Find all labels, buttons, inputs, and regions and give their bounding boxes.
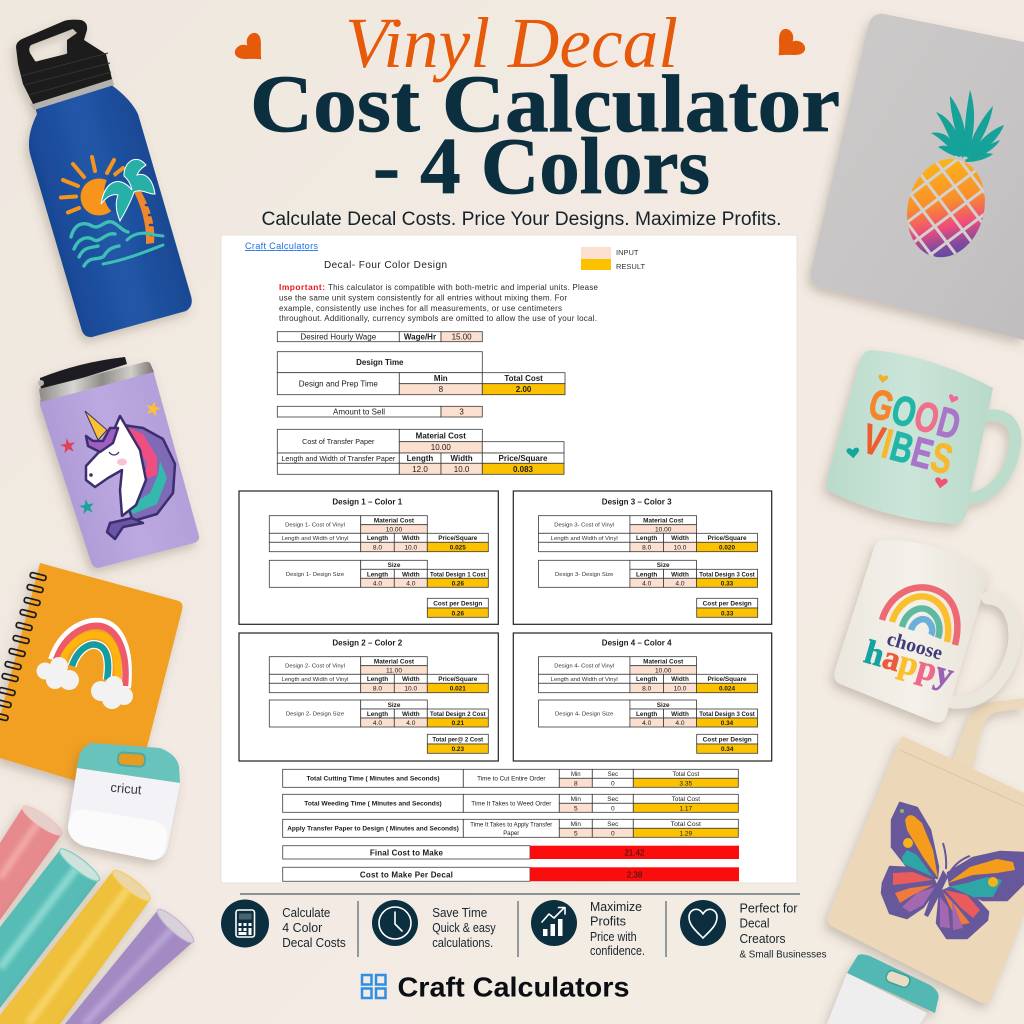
design size table: Width (671, 571, 689, 578)
table: total cutting time: 3.35 (679, 780, 693, 787)
table: desired hourly wage: 15.00 (452, 333, 472, 342)
product: mint mug "Good Vibes" (826, 350, 1016, 524)
icon: growth chart (531, 900, 577, 946)
table: amount to sell: Amount to Sell (333, 408, 385, 417)
design size table (269, 560, 488, 587)
decal: butterfly (882, 803, 1024, 938)
mug hearts (846, 374, 959, 489)
table: total weeding time: Time It Takes to Weed Order (471, 801, 551, 808)
table: design time: 8 (439, 385, 444, 394)
table: total cutting time: Min (571, 772, 581, 778)
feature: perfect for decal creators: & Small Businesses (740, 950, 826, 961)
table: apply transfer paper: Total Cost (671, 821, 701, 828)
vinyl cost table: 10.0 (404, 686, 418, 693)
icon: logo grid (362, 975, 386, 998)
feature: calculate 4 color decal costs: Decal Costs (282, 936, 346, 950)
important note: example, consistently use inches for all measurements, or use centimeters (279, 304, 562, 313)
design size table: Length (636, 711, 657, 718)
decal: pineapple (896, 90, 1004, 266)
panel: Design 3 - Color 3: Design 3 – Color 3 (602, 498, 672, 506)
vinyl cost table: Length (636, 676, 657, 683)
table: total cutting time: Sec (608, 772, 618, 778)
design size table: Length (367, 571, 388, 578)
table: transfer paper: 12.0 (412, 465, 428, 474)
table: apply transfer paper: 5 (574, 830, 578, 837)
design size table: 4.0 (406, 720, 416, 727)
vinyl cost table: 8.0 (373, 686, 382, 693)
design size table: Total Design 3 Cost (699, 712, 755, 718)
design size table: Size (388, 702, 401, 709)
product: blue water bottle with beach decal (16, 20, 192, 337)
design size table: Length (636, 571, 657, 578)
vinyl cost table: 0.025 (450, 545, 466, 552)
table: total cutting time: Time to Cut Entire Order (477, 776, 545, 783)
result: cost to make per decal: Cost to Make Per Decal (360, 870, 453, 880)
table: total cutting time: Total Cost (672, 772, 699, 778)
decal: stars (59, 400, 162, 515)
cost per design: 0.26 (452, 610, 464, 617)
table: total cutting time (283, 769, 738, 787)
table: apply transfer paper: Min (571, 821, 581, 828)
legend: INPUT (616, 248, 639, 257)
table: apply transfer paper: Paper (503, 831, 519, 837)
vinyl cost table: Price/Square (438, 535, 478, 542)
table: total weeding time (283, 794, 738, 812)
design size table: Total Design 1 Cost (430, 572, 486, 578)
table: transfer paper: Material Cost (416, 432, 466, 440)
design size table: Length (367, 711, 388, 718)
panel: Design 2 - Color 2 (239, 633, 498, 761)
link: Craft Calculators: Craft Calculators (245, 241, 318, 251)
design size table: Size (657, 562, 670, 569)
product: silver laptop with pineapple decal (810, 14, 1024, 340)
heading: Cost Calculator: Cost Calculator (250, 58, 840, 149)
vinyl roll: yellow (0, 866, 154, 1024)
vinyl cost table: 10.0 (404, 545, 418, 552)
vinyl cost table: 0.020 (719, 545, 735, 552)
table: transfer paper: Width (451, 454, 473, 463)
vinyl cost table (538, 657, 758, 693)
table: design time: Design Time (356, 358, 404, 367)
vinyl cost table: Design 3- Cost of Vinyl (554, 523, 614, 529)
vinyl cost table: Price/Square (438, 676, 478, 683)
heading: Vinyl Decal: Vinyl Decal (345, 3, 678, 83)
panel: Design 1 - Color 1 (239, 491, 498, 624)
cost per design (427, 734, 488, 753)
vinyl cost table: Length and Width of Vinyl (551, 536, 618, 542)
feature: save time: Quick & easy (432, 921, 496, 935)
legend (581, 247, 645, 271)
vinyl cost table: Length and Width of Vinyl (551, 677, 618, 683)
feature: maximize profits: Price with (590, 930, 637, 944)
vinyl cost table: 8.0 (373, 545, 382, 552)
vinyl cost table: Design 1- Cost of Vinyl (285, 523, 345, 529)
panel: Design 4 - Color 4: Design 4 – Color 4 (602, 638, 672, 648)
vinyl cost table: Material Cost (374, 659, 415, 666)
table: transfer paper: 10.0 (454, 465, 470, 474)
table: design time (277, 352, 565, 395)
table: transfer paper (277, 429, 564, 474)
vinyl cost table: 11.00 (386, 667, 402, 674)
vinyl cost table: Width (671, 676, 689, 683)
design size table: Design 4- Design Size (555, 712, 614, 718)
feature: save time: Save Time (432, 905, 487, 920)
design size table: 4.0 (373, 720, 382, 727)
vinyl cost table: Length (367, 676, 388, 683)
feature: maximize profits: confidence. (590, 944, 645, 958)
result: final cost to make: 21.42 (624, 848, 645, 858)
vinyl cost table: Length (636, 535, 657, 542)
cost per design (697, 598, 758, 617)
table: total weeding time: 0 (611, 805, 615, 812)
feature: perfect for decal creators (680, 900, 826, 961)
design size table: 4.0 (406, 580, 416, 587)
cost per design: 0.23 (452, 746, 464, 753)
vinyl cost table: Design 4- Cost of Vinyl (554, 664, 614, 670)
design size table: 4.0 (642, 580, 652, 587)
icon: clock (372, 900, 418, 946)
squeegee brand text: cricut (110, 780, 143, 797)
subtitle: Calculate Decal Costs. Price Your Designs. Maximize Profits. (262, 209, 782, 230)
important note: Important: (279, 282, 325, 292)
vinyl cost table: Length (367, 535, 388, 542)
icon: left heart (232, 30, 272, 70)
feature: perfect for decal creators: Perfect for (740, 901, 798, 916)
vinyl cost table: Material Cost (643, 659, 684, 666)
vinyl cost table: 10.00 (386, 526, 403, 533)
table: transfer paper: 10.00 (431, 443, 451, 452)
feature: maximize profits: Profits (590, 914, 626, 929)
table: transfer paper: Length and Width of Transfer Paper (281, 454, 396, 463)
design size table (269, 700, 488, 727)
sticker: rainbow with clouds (36, 623, 133, 709)
table: total weeding time: Sec (607, 796, 619, 803)
feature: calculate 4 color decal costs (221, 900, 346, 950)
product: squeegee corner (827, 954, 939, 1024)
table: apply transfer paper (283, 819, 738, 837)
vinyl cost table: 0.024 (719, 686, 735, 693)
result: cost to make per decal: 2.38 (627, 870, 643, 880)
design size table: Total Design 3 Cost (699, 572, 755, 578)
table: apply transfer paper: Sec (607, 821, 619, 828)
table: total weeding time: Min (571, 796, 581, 803)
table: transfer paper: Cost of Transfer Paper (302, 437, 375, 446)
feature: save time: calculations. (432, 936, 493, 950)
cost per design: Total per@ 2 Cost (432, 738, 483, 744)
table: apply transfer paper: 0 (611, 830, 615, 837)
table: total cutting time: 0 (611, 780, 615, 787)
vinyl cost table: 10.0 (674, 686, 687, 693)
product: canvas tote bag with butterfly decal (827, 698, 1024, 1003)
feature: maximize profits: Maximize (590, 899, 642, 914)
cost per design: 0.33 (721, 610, 734, 617)
cost per design: Cost per Design (703, 601, 752, 608)
panel: Design 2 - Color 2: Design 2 – Color 2 (332, 638, 403, 648)
vinyl cost table: Width (402, 676, 420, 683)
design size table: Size (657, 702, 670, 709)
table: desired hourly wage: Desired Hourly Wage (300, 333, 377, 342)
vinyl cost table: Price/Square (707, 676, 747, 683)
mug lettering: GOOD (864, 379, 965, 449)
cost per design: Cost per Design (703, 737, 752, 744)
design size table: 0.34 (721, 720, 734, 727)
table: total cutting time: Total Cutting Time ( Minutes and Seconds) (306, 776, 440, 783)
logo: Craft Calculators: Craft Calculators (398, 972, 630, 1003)
cost per design: 0.34 (721, 746, 734, 753)
product: purple tumbler with unicorn decal (38, 357, 199, 568)
icon: heart (680, 900, 726, 946)
vinyl cost table: 8.0 (642, 686, 652, 693)
product: Cricut squeegee (68, 743, 180, 860)
vinyl cost table: Width (402, 535, 420, 542)
vinyl cost table: Material Cost (374, 518, 415, 525)
panel: Design 1 - Color 1: Design 1 – Color 1 (332, 498, 403, 506)
important note: throughout. Additionally, currency symbols are omitted to allow the use of your local. (279, 314, 597, 323)
table: amount to sell (277, 406, 482, 417)
cost per design (697, 734, 758, 753)
feature: calculate 4 color decal costs: Calculate (282, 905, 330, 920)
table: design time: Design and Prep Time (299, 380, 378, 388)
design size table: 4.0 (675, 720, 685, 727)
heading: - 4 Colors: - 4 Colors (373, 123, 710, 211)
feature: maximize profits (531, 899, 645, 958)
decal: sun and palm tree (61, 157, 163, 266)
legend: RESULT (616, 262, 645, 271)
table: total weeding time: Total Cost (672, 796, 700, 803)
product: white mug "choose happy" (834, 540, 1015, 722)
table: transfer paper: 0.083 (513, 465, 534, 474)
design size table: Width (671, 711, 689, 718)
table: total weeding time: 1.17 (679, 805, 693, 812)
table: desired hourly wage (277, 332, 482, 342)
feature: calculate 4 color decal costs: 4 Color (282, 921, 322, 935)
icon: calculator (221, 900, 269, 948)
design size table: 0.33 (721, 580, 734, 587)
mug decal: rainbow (882, 587, 957, 645)
important note: This calculator is compatible with both-metric and imperial units. Please (328, 283, 599, 292)
table: transfer paper: Price/Square (499, 454, 548, 463)
table: transfer paper: Length (407, 454, 433, 463)
result: final cost to make (283, 846, 739, 859)
table: total weeding time: 5 (574, 805, 578, 812)
design size table: Width (402, 571, 420, 578)
table: total cutting time: 8 (574, 780, 578, 787)
vinyl roll: purple (65, 905, 197, 1024)
vinyl cost table: 10.00 (655, 667, 672, 674)
vinyl cost table: 0.021 (450, 686, 466, 693)
design size table (538, 560, 758, 587)
vinyl roll: teal (0, 845, 103, 1008)
vinyl cost table: 8.0 (642, 545, 652, 552)
vinyl cost table: 10.00 (655, 526, 672, 533)
table: design time: 2.00 (516, 385, 532, 394)
cost per design (427, 598, 488, 617)
cost per design: Cost per Design (433, 601, 482, 608)
vinyl cost table (538, 516, 758, 552)
panel: calculator spreadsheet sheet (221, 235, 797, 883)
design size table: 0.21 (452, 720, 464, 727)
vinyl cost table: Price/Square (707, 535, 747, 542)
vinyl cost table: Design 2- Cost of Vinyl (285, 664, 345, 670)
notebook spiral binding (0, 572, 46, 721)
design size table: 4.0 (675, 580, 685, 587)
table: amount to sell: 3 (459, 408, 464, 417)
design size table: Total Design 2 Cost (430, 712, 486, 718)
vinyl cost table: 10.0 (674, 545, 687, 552)
table: design time: Min (434, 374, 448, 383)
vinyl cost table (269, 657, 488, 693)
vinyl cost table: Length and Width of Vinyl (281, 677, 349, 683)
design size table (538, 700, 758, 727)
result: cost to make per decal (283, 867, 739, 881)
vinyl cost table: Width (671, 535, 689, 542)
table: desired hourly wage: Wage/Hr (404, 333, 436, 342)
panel: Design 4 - Color 4 (513, 633, 772, 761)
vinyl cost table: Material Cost (643, 518, 684, 525)
vinyl cost table: Length and Width of Vinyl (281, 536, 349, 542)
design size table: 0.26 (452, 580, 464, 587)
table: design time: Total Cost (504, 374, 543, 383)
sheet title: Decal- Four Color Design (324, 260, 447, 271)
product: vinyl rolls (0, 802, 197, 1024)
design size table: 4.0 (642, 720, 652, 727)
vinyl cost table (269, 516, 488, 552)
important note: use the same unit system consistently for all entries without mixing them. For (279, 294, 567, 302)
panel: Design 3 - Color 3 (513, 491, 772, 624)
feature: perfect for decal creators: Creators (740, 931, 786, 946)
table: apply transfer paper: Time It Takes to Apply Transfer (470, 822, 552, 828)
feature: save time (372, 900, 496, 950)
icon: right heart (768, 26, 808, 66)
vinyl roll: pink (0, 802, 66, 920)
design size table: Design 3- Design Size (555, 572, 614, 578)
table: apply transfer paper: 1.29 (679, 830, 693, 837)
feature: perfect for decal creators: Decal (740, 916, 770, 931)
design size table: Size (388, 562, 401, 569)
mug lettering (858, 379, 965, 484)
design size table: Width (402, 711, 420, 718)
mug lettering: VIBES (858, 415, 958, 484)
design size table: 4.0 (373, 580, 382, 587)
product: orange spiral notebook with rainbow sticker (0, 563, 183, 780)
table: apply transfer paper: Apply Transfer Paper to Design ( Minutes and Seconds) (287, 826, 459, 833)
important note (279, 282, 599, 323)
result: final cost to make: Final Cost to Make (370, 848, 443, 858)
table: total weeding time: Total Weeding Time ( Minutes and Seconds) (304, 801, 442, 808)
mug lettering: choose (884, 628, 945, 665)
design size table: Design 1- Design Size (286, 572, 345, 578)
mug lettering: happy (860, 634, 958, 694)
design size table: Design 2- Design Size (286, 712, 345, 718)
decal: unicorn (85, 411, 175, 539)
